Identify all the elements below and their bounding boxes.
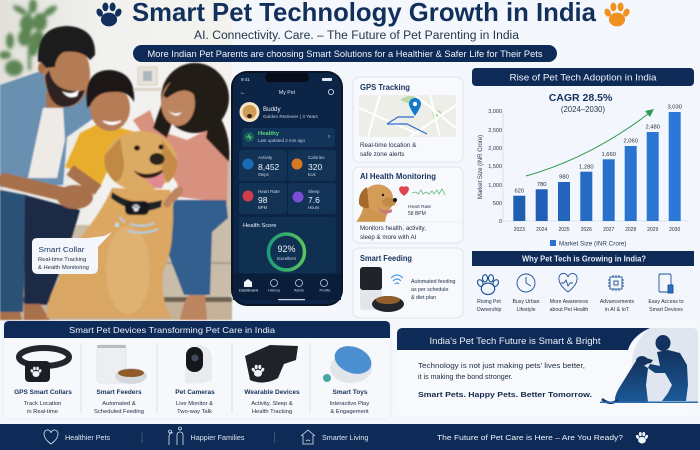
icon: wifi xyxy=(391,275,403,284)
bar chart: 2,500 xyxy=(488,128,502,134)
bar chart: 3,000 xyxy=(488,109,502,115)
panel: AI health monitoring: Monitors health, activity, xyxy=(360,225,426,232)
man xyxy=(0,72,94,187)
stat tiles: BPM xyxy=(258,205,268,210)
bottom nav: Dashboard xyxy=(239,288,258,292)
health score xyxy=(239,217,336,273)
bottom nav: Profile xyxy=(319,288,331,292)
icon row: why growing xyxy=(477,273,673,294)
health score: Excellent xyxy=(277,256,297,261)
panel: AI health monitoring: 58 BPM xyxy=(408,211,426,217)
device: wearable: Wearable Devices xyxy=(244,389,300,396)
device: wearable: Activity, Sleep & xyxy=(251,401,293,407)
panel: rise of pet tech adoption: Rise of Pet Tech Adoption in India xyxy=(510,72,657,82)
bar chart: 0 xyxy=(499,219,502,225)
map xyxy=(359,95,456,137)
device: wearable xyxy=(244,345,300,415)
health score: Health Score xyxy=(243,223,277,229)
woman xyxy=(133,110,228,203)
icon: smart home xyxy=(301,430,315,444)
bar chart: 3,030 xyxy=(667,104,682,110)
icon: orange paw xyxy=(603,3,631,26)
health status: Last updated 2 min ago xyxy=(258,138,306,143)
dog xyxy=(47,188,173,318)
panel: future smart and bright xyxy=(397,326,698,416)
subtitle: AI. Connectivity. Care. – The Future of Pet Parenting in India xyxy=(194,30,520,42)
panel: rise of pet tech adoption xyxy=(472,68,694,315)
dog photo xyxy=(356,184,397,222)
icon: white paw xyxy=(635,432,649,443)
footer band: Happier Families xyxy=(190,433,245,442)
panel: GPS tracking: GPS Tracking xyxy=(360,83,410,92)
bar chart: 2028 xyxy=(625,227,636,233)
panel: smart pet devices: Smart Pet Devices Transforming Pet Care in India xyxy=(69,325,275,335)
bar chart: 2026 xyxy=(581,227,592,233)
bar chart: 2025 xyxy=(558,227,570,233)
bar chart: 1,660 xyxy=(601,152,616,158)
footer band: Smarter Living xyxy=(322,433,368,442)
device: smart feeder xyxy=(94,345,147,415)
captions: why growing: about Pet Health xyxy=(550,307,588,313)
bar chart: 980 xyxy=(559,174,569,180)
bar chart: 2,000 xyxy=(488,146,502,152)
captions: why growing: Ownership xyxy=(477,307,502,313)
panel: smart pet devices xyxy=(3,321,391,419)
health score: 92% xyxy=(277,244,296,254)
banner: More Indian Pet Parents are choosing Smart Solutions for a Healthier & Safer Life for Their Pets xyxy=(148,49,543,59)
bar chart: Market Size (INR Crore) xyxy=(478,135,484,199)
panel: GPS tracking: Real-time location & xyxy=(360,142,417,149)
device: GPS smart collar xyxy=(14,348,72,415)
captions: why growing: Smart Devices xyxy=(649,307,683,313)
stat tiles: 98 xyxy=(258,195,268,205)
panel: smart feeding xyxy=(353,248,463,318)
profile xyxy=(240,102,319,122)
device: smart toy xyxy=(323,341,375,415)
profile: Buddy xyxy=(263,106,281,113)
stat tiles: kcal xyxy=(308,172,316,177)
icon: heart xyxy=(44,430,58,444)
bar chart: 1,500 xyxy=(488,164,502,170)
panel: smart feeding: & diet plan xyxy=(411,295,436,301)
callout: smart collar: & Health Monitoring xyxy=(38,265,89,271)
banner xyxy=(133,45,557,62)
bar chart: 2023 xyxy=(514,227,525,233)
device: smart feeder: Smart Feeders xyxy=(96,389,142,396)
captions: why growing: Advancements xyxy=(600,299,635,305)
phone app mockup: My Pet xyxy=(279,90,296,96)
device: smart toy: & Engagement xyxy=(330,409,369,415)
bottom nav: History xyxy=(268,288,280,292)
boy xyxy=(65,123,140,187)
device: pet camera: Two-way Talk xyxy=(177,409,212,415)
panel: AI health monitoring: sleep & more with AI xyxy=(360,234,417,241)
callout: smart collar xyxy=(32,232,112,274)
panel: AI health monitoring xyxy=(353,167,463,243)
captions: why growing: Lifestyle xyxy=(516,307,536,313)
panel: GPS tracking xyxy=(353,77,463,162)
bar chart: 1,000 xyxy=(488,183,502,189)
device: smart toy: Smart Toys xyxy=(333,389,368,396)
panel: future smart and bright: India's Pet Tech Future is Smart & Bright xyxy=(430,336,601,346)
heading: why pet tech: Why Pet Tech is Growing in India? xyxy=(522,254,646,264)
bar chart: 2030 xyxy=(669,227,680,233)
phone app mockup: ← xyxy=(240,90,246,96)
captions: why growing: Busy Urban xyxy=(512,299,540,305)
bottom nav: Alerts xyxy=(294,288,304,292)
footer band: Healthier Pets xyxy=(65,433,111,442)
device: smart feeder: Scheduled Feeding xyxy=(94,409,144,415)
panel: future smart and bright: Technology is not just making pets' lives better, xyxy=(418,362,585,370)
bar chart: 2,480 xyxy=(645,124,660,130)
captions: why growing: Easy Access to xyxy=(648,299,684,305)
icon: navy paw xyxy=(95,3,123,26)
device: wearable: Health Tracking xyxy=(252,409,292,415)
legend: Market Size (INR Crore) xyxy=(559,240,627,248)
profile: Golden Retriever | 3 Years xyxy=(263,114,319,119)
captions: why growing: in AI & IoT xyxy=(605,307,630,313)
device: smart toy: Interactive Play xyxy=(330,401,369,407)
panel: future smart and bright: it is making the bond stronger. xyxy=(418,373,513,381)
stat tiles: Sleep xyxy=(308,189,320,194)
captions: why growing: Rising Pet xyxy=(477,299,501,305)
panel: smart feeding: Smart Feeding xyxy=(360,254,412,263)
bar chart: 780 xyxy=(537,182,547,188)
sofa xyxy=(20,225,232,297)
panel: smart feeding: as per schedule xyxy=(411,287,448,293)
bar chart: 2027 xyxy=(603,227,614,233)
heading: why pet tech xyxy=(472,251,694,266)
heart and pulse xyxy=(399,186,445,196)
bar chart: 500 xyxy=(493,201,502,207)
footer band: The Future of Pet Care is Here – Are You Ready? xyxy=(437,433,623,442)
family photo with dog xyxy=(0,0,232,320)
phone app mockup: 9:41 xyxy=(241,77,250,82)
callout: smart collar: Smart Collar xyxy=(38,245,85,254)
panel: smart feeding: Automated feeding xyxy=(411,279,456,285)
panel: AI health monitoring: Heart Rate xyxy=(408,204,432,210)
bottom nav xyxy=(233,274,341,300)
bar chart: 620 xyxy=(514,188,524,194)
device: GPS smart collar: in Real-time xyxy=(27,409,58,415)
panel: rise of pet tech adoption: CAGR 28.5% xyxy=(549,92,613,104)
panel: GPS tracking: safe zone alerts xyxy=(360,151,404,158)
bar chart: 1,280 xyxy=(579,164,594,170)
plant xyxy=(0,0,59,76)
panel: future smart and bright: Smart Pets. Happy Pets. Better Tomorrow. xyxy=(418,390,592,399)
bar chart: 2024 xyxy=(536,227,547,233)
bar chart xyxy=(478,104,688,233)
device: pet camera: Live Monitor & xyxy=(176,401,213,407)
health status: › xyxy=(328,134,330,140)
device: smart feeder: Automated & xyxy=(102,401,136,407)
bar chart: 2,060 xyxy=(623,138,638,144)
device: GPS smart collar: GPS Smart Collars xyxy=(14,389,72,396)
health status xyxy=(242,128,335,147)
footer band xyxy=(0,424,700,450)
icon: family xyxy=(169,427,183,445)
stat tiles: Calories xyxy=(308,155,325,160)
stat tiles xyxy=(239,150,336,214)
stat tiles: Hours xyxy=(308,205,319,210)
captions: why growing: More Awareness xyxy=(550,299,589,305)
health status: Healthy xyxy=(258,131,280,137)
stat tiles: 8,452 xyxy=(258,162,280,172)
feeder illustration xyxy=(360,267,404,312)
captions: why growing xyxy=(477,299,684,313)
silhouette: owner with dog xyxy=(600,328,698,403)
stat tiles: Steps xyxy=(258,172,269,177)
phone app mockup xyxy=(231,71,343,306)
panel: rise of pet tech adoption: (2024–2030) xyxy=(561,105,606,114)
arrow: growth trend xyxy=(526,109,654,176)
device: pet camera xyxy=(175,345,215,415)
panel: AI health monitoring: AI Health Monitoring xyxy=(360,172,436,181)
stat tiles: 320 xyxy=(308,162,322,172)
stat tiles: 7.6 xyxy=(308,195,320,205)
bar chart: 2029 xyxy=(647,227,658,233)
callout: smart collar: Real-time Tracking xyxy=(38,257,86,263)
device: pet camera: Pet Cameras xyxy=(175,389,215,396)
stat tiles: Activity xyxy=(258,155,273,160)
device: GPS smart collar: Track Location xyxy=(24,401,61,407)
stat tiles: Heart Rate xyxy=(258,189,280,194)
